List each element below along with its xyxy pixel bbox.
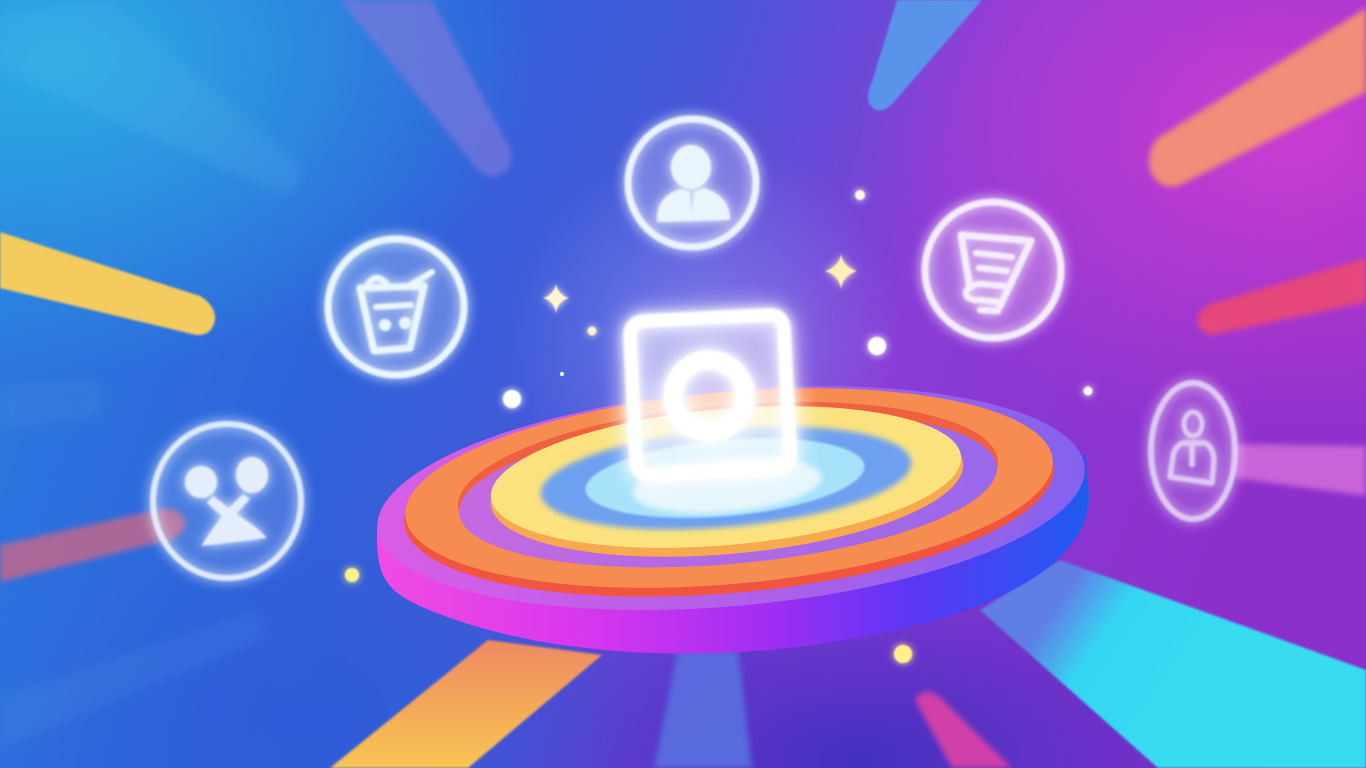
- white pool of light: [630, 450, 824, 520]
- icon: group badge: [153, 424, 301, 578]
- ray: violet top: [340, 0, 512, 177]
- ray: faint cyan top left: [0, 0, 301, 195]
- dot: far right: [1084, 386, 1092, 396]
- red inner edge: [451, 382, 1005, 586]
- ray: faint blue lower left: [0, 610, 266, 750]
- lock shackle: [1184, 412, 1202, 436]
- cup outline: [360, 286, 424, 351]
- right head: [236, 457, 268, 493]
- lock body: [1170, 443, 1214, 483]
- ray: red right: [1198, 258, 1366, 334]
- yellow ring: [485, 389, 967, 565]
- icon: lock badge: [1151, 383, 1235, 519]
- ray: pink bottom: [915, 692, 1012, 768]
- sparkle: left: [543, 284, 569, 313]
- red ring shadow: [396, 369, 1062, 621]
- blue ring: [536, 413, 916, 543]
- sparkles and glowing dots: [345, 190, 1092, 663]
- person shoulders: [657, 188, 730, 222]
- disc side wall: [377, 455, 1089, 654]
- cyan ring: [582, 428, 868, 528]
- joined body: [201, 494, 267, 546]
- cup lid and straw: [368, 272, 432, 307]
- ray: orange bottom: [330, 640, 602, 768]
- left head: [185, 466, 217, 498]
- person head: [671, 145, 711, 189]
- ray: rose left: [0, 508, 185, 582]
- dot: tiny left: [560, 372, 564, 376]
- funnel outline: [961, 235, 1031, 306]
- ray: blue top right: [868, 0, 982, 110]
- dot: yellow lower left: [345, 568, 359, 582]
- ray: periwinkle bottom: [654, 650, 752, 768]
- gold ring edge: [485, 394, 969, 574]
- dot: top right: [855, 190, 865, 200]
- ray: faint blue left: [0, 380, 104, 430]
- disc top surface: [368, 359, 1094, 637]
- ray: cyan bottom right: [980, 560, 1366, 768]
- dot: large left: [503, 390, 521, 408]
- icon: funnel cart badge: [925, 202, 1061, 338]
- ray: magenta right: [1235, 444, 1366, 496]
- dot: yellow bottom: [894, 645, 912, 663]
- icon: central glowing camera card: [630, 315, 790, 475]
- ray: salmon top right: [1149, 8, 1366, 187]
- cup eyes: [379, 319, 391, 331]
- bloom on disc behind card: [617, 385, 807, 465]
- dot: large right: [868, 337, 886, 355]
- rainbow disc platform: [368, 359, 1094, 654]
- orange ring: [397, 364, 1061, 612]
- sparkle: right: [825, 254, 857, 289]
- purple inner ring: [453, 393, 1003, 587]
- ray: yellow left: [0, 232, 215, 335]
- icon: drink cup badge: [328, 239, 464, 375]
- dot: small left: [588, 326, 596, 336]
- icon: person badge: [628, 119, 756, 247]
- funnel lines: [966, 253, 1012, 311]
